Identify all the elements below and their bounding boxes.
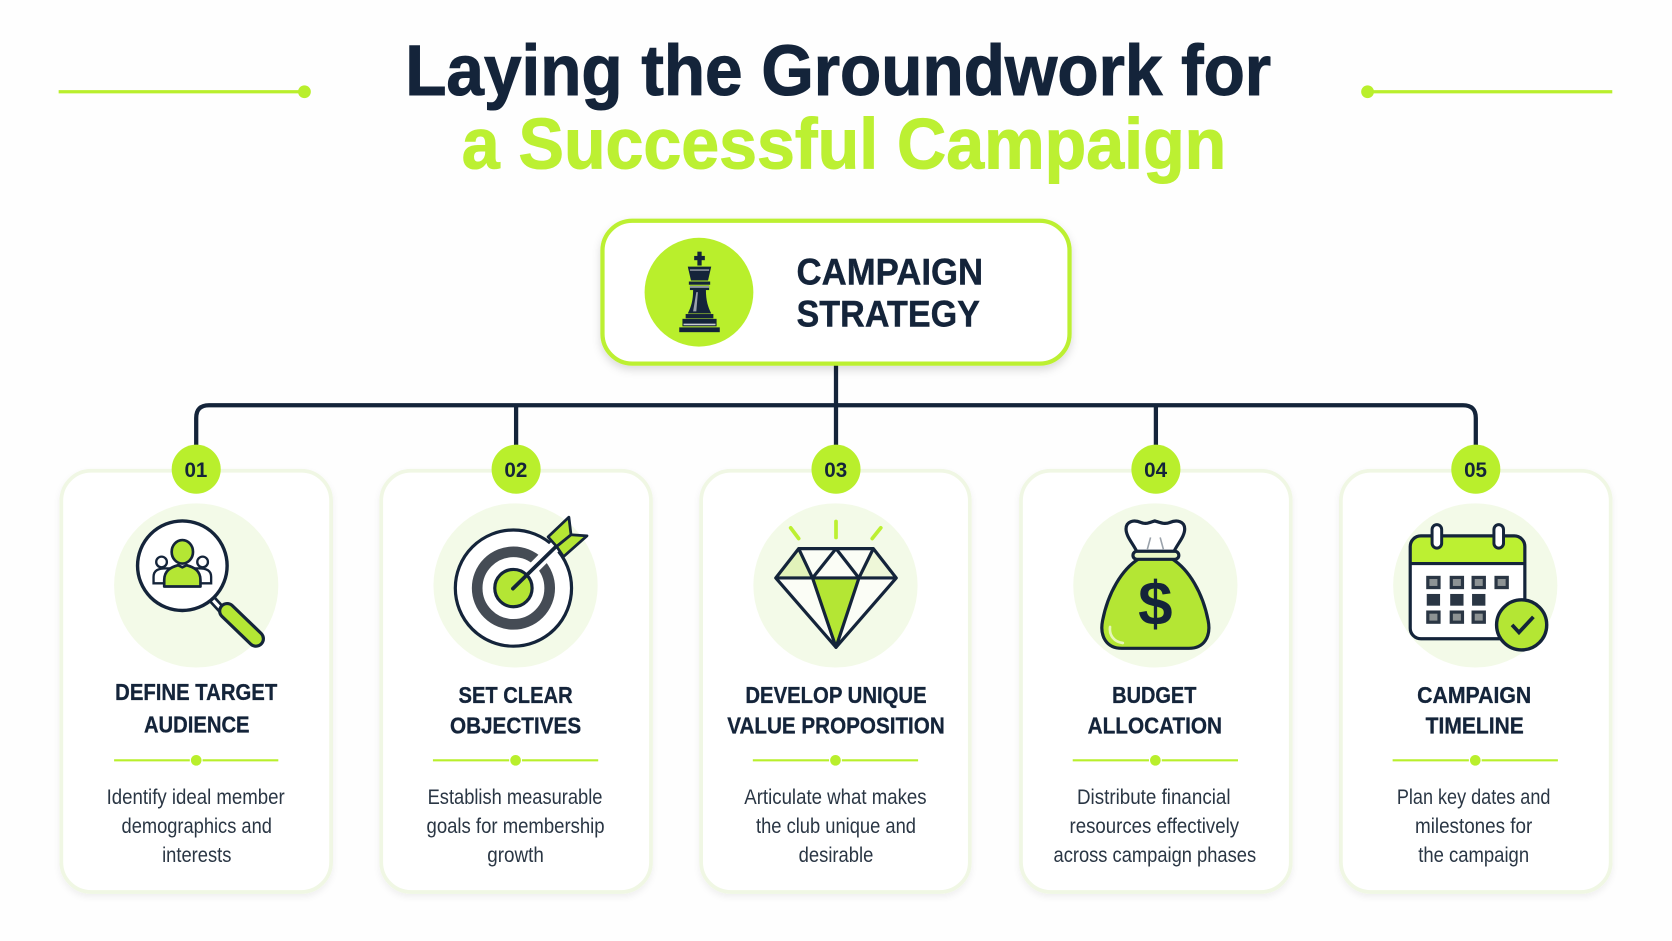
heading 01	[115, 679, 278, 738]
heading 02: OBJECTIVES	[450, 713, 581, 739]
badge 04	[1131, 445, 1180, 494]
heading 05: TIMELINE	[1426, 713, 1524, 739]
heading 03	[727, 682, 945, 739]
campaign strategy label	[797, 251, 983, 334]
heading 03: VALUE PROPOSITION	[727, 713, 945, 739]
description 03: Articulate what makes	[744, 785, 927, 809]
description 04: resources effectively	[1070, 814, 1239, 838]
heading 05	[1417, 682, 1531, 739]
heading 01: DEFINE TARGET	[115, 679, 278, 705]
heading 05: CAMPAIGN	[1417, 682, 1531, 708]
title	[405, 31, 1271, 184]
title: Laying the Groundwork for	[405, 31, 1271, 111]
description 03: desirable	[799, 843, 873, 867]
left title ornament	[59, 85, 311, 98]
icon: magnifier with people	[114, 503, 278, 668]
panel: card 05 campaign timeline	[1341, 445, 1611, 892]
description 05: the campaign	[1418, 843, 1529, 867]
description 02	[427, 785, 605, 867]
description 05: milestones for	[1415, 814, 1532, 838]
heading 04	[1088, 682, 1222, 739]
heading 04: ALLOCATION	[1088, 713, 1222, 739]
panel: card 04 budget allocation	[1021, 445, 1291, 892]
badge 02	[492, 445, 541, 494]
panel: card 01 define target audience	[61, 445, 331, 892]
campaign strategy label: STRATEGY	[797, 292, 980, 334]
icon: chess king	[645, 238, 753, 347]
description 04	[1054, 785, 1256, 867]
title: a Successful Campaign	[462, 104, 1226, 184]
description 01: interests	[162, 843, 231, 867]
description 04: across campaign phases	[1054, 843, 1256, 867]
description 04: Distribute financial	[1077, 785, 1231, 809]
badge 03: 03	[824, 458, 847, 482]
heading 04: BUDGET	[1112, 682, 1197, 708]
badge 05	[1451, 445, 1500, 494]
badge 03	[811, 445, 861, 494]
campaign strategy label: CAMPAIGN	[797, 251, 983, 293]
icon: money bag: $	[1138, 570, 1173, 639]
heading 03: DEVELOP UNIQUE	[745, 682, 927, 708]
connector lines	[196, 365, 1476, 453]
heading 01: AUDIENCE	[144, 712, 250, 738]
description 02: growth	[487, 843, 544, 867]
badge 05: 05	[1464, 458, 1487, 482]
description 05: Plan key dates and	[1397, 785, 1550, 809]
heading 02	[450, 682, 581, 739]
icon: target with arrow	[433, 503, 598, 668]
badge 01: 01	[184, 458, 208, 482]
panel: card 02 set clear objectives	[381, 445, 651, 892]
description 02: Establish measurable	[428, 785, 602, 809]
heading 02: SET CLEAR	[459, 682, 573, 708]
description 02: goals for membership	[427, 814, 605, 838]
badge 02: 02	[504, 458, 527, 482]
panel: campaign strategy	[602, 221, 1070, 364]
description 01: demographics and	[122, 814, 272, 838]
right title ornament	[1361, 85, 1612, 98]
description 05	[1397, 785, 1550, 867]
panel: card 03 develop unique value proposition	[701, 445, 970, 892]
description 01: Identify ideal member	[107, 785, 285, 809]
badge 04: 04	[1144, 458, 1167, 482]
badge 01	[172, 445, 221, 494]
description 01	[107, 785, 285, 867]
description 03	[744, 785, 927, 867]
description 03: the club unique and	[756, 814, 916, 838]
icon: diamond	[753, 503, 918, 668]
icon: money bag	[1073, 503, 1237, 668]
icon: calendar with check	[1393, 503, 1557, 668]
